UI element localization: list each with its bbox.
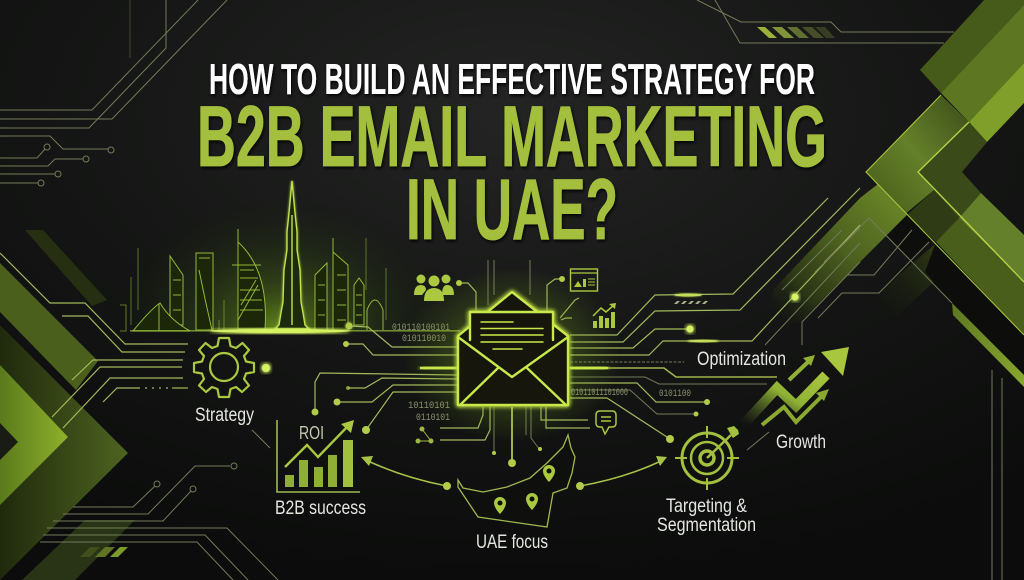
icon: chat bubble: [596, 411, 616, 434]
label: Targeting and Segmentation: Targeting &: [666, 496, 747, 517]
binary text: [392, 323, 691, 424]
binary text: 010110010: [402, 334, 446, 345]
horizon glow line: [130, 329, 460, 333]
icon: mini bars: [593, 303, 616, 328]
icon: analytics window: [570, 269, 598, 291]
top right geometric chevrons: [768, 0, 1024, 387]
label: Targeting and Segmentation: Segmentation: [657, 515, 756, 536]
arrow: UAE to targeting: [576, 456, 667, 490]
binary text: 0101100: [659, 389, 691, 400]
icon: target: [675, 426, 739, 490]
title line 3: IN UAE?: [406, 162, 618, 258]
growth connector: [747, 432, 769, 450]
icon: growth arrows: [744, 347, 849, 425]
icon: people: [414, 274, 454, 301]
envelope connecting lines top and bottom: [440, 260, 590, 467]
icon: gear: [194, 338, 254, 397]
icon: Burj Al Arab: [232, 229, 265, 329]
left geometric chevrons: [0, 230, 135, 580]
bar chart: ROI: ROI: [299, 423, 324, 443]
arrow: UAE to B2B success: [361, 456, 451, 490]
binary text: 0110101: [416, 413, 450, 424]
binary text: 10110101: [408, 401, 450, 412]
label: Growth: Growth: [776, 432, 826, 453]
icon: UAE map: [458, 435, 575, 527]
top right lines and stripes: [697, 0, 954, 43]
label: UAE focus: UAE focus: [476, 532, 548, 553]
label: B2B success: B2B success: [275, 498, 366, 519]
buildings: [120, 238, 386, 331]
left circuit lines to gear: [0, 253, 188, 428]
skyline glow: [110, 196, 450, 331]
strategy connector: [252, 430, 270, 448]
label: Optimization: Optimization: [697, 349, 786, 370]
icon: Burj Khalifa: [275, 181, 309, 329]
right circuit lines: [570, 188, 1002, 580]
main glow rays: [420, 367, 608, 369]
envelope connecting lines left: [262, 322, 457, 434]
label: Strategy: Strategy: [195, 405, 254, 426]
icon: central envelope: [458, 292, 568, 405]
label: Targeting and Segmentation: [657, 496, 756, 536]
envelope halo: [402, 267, 622, 443]
binary text: 010110100101: [392, 323, 450, 334]
top left circuit lines: [0, 0, 227, 186]
bar chart: ROI: [277, 420, 360, 492]
binary text: 01011011101000: [571, 388, 628, 399]
bottom left circuit lines: [40, 463, 278, 580]
city skyline: [120, 181, 386, 331]
icon: share nodes: [416, 427, 433, 443]
